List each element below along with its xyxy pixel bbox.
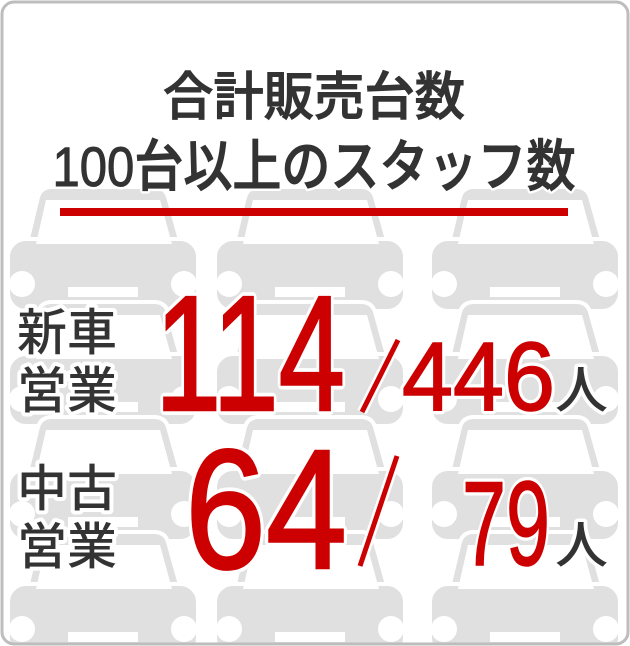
unit 人: 人 [555, 518, 608, 574]
total 446: 446 [402, 322, 555, 431]
total 79: 79 [462, 457, 550, 591]
number 64: 64 [185, 415, 347, 605]
total 79: 79 [462, 457, 550, 591]
label: 中古営業: 営業 [17, 519, 117, 575]
total 79 [462, 457, 550, 591]
label: 中古営業: 中古 [17, 461, 117, 517]
slash [360, 456, 397, 566]
background: car pattern [8, 187, 620, 646]
slash [362, 340, 398, 412]
total 446: 446 [402, 322, 555, 431]
title [52, 69, 576, 198]
red underline [60, 208, 568, 216]
title: 合計販売台数 [163, 69, 465, 127]
row: used car sales [17, 415, 608, 605]
number 114: 114 [155, 262, 345, 445]
number 114: 114 [155, 262, 345, 445]
row: new car sales [17, 262, 608, 445]
label: 新車営業: 営業 [17, 363, 117, 419]
label: 新車営業: 新車 [17, 305, 117, 361]
label: 中古営業 [17, 461, 117, 575]
number 64: 64 [185, 415, 347, 605]
unit 人: 人 [555, 363, 608, 419]
label: 新車営業 [17, 305, 117, 419]
